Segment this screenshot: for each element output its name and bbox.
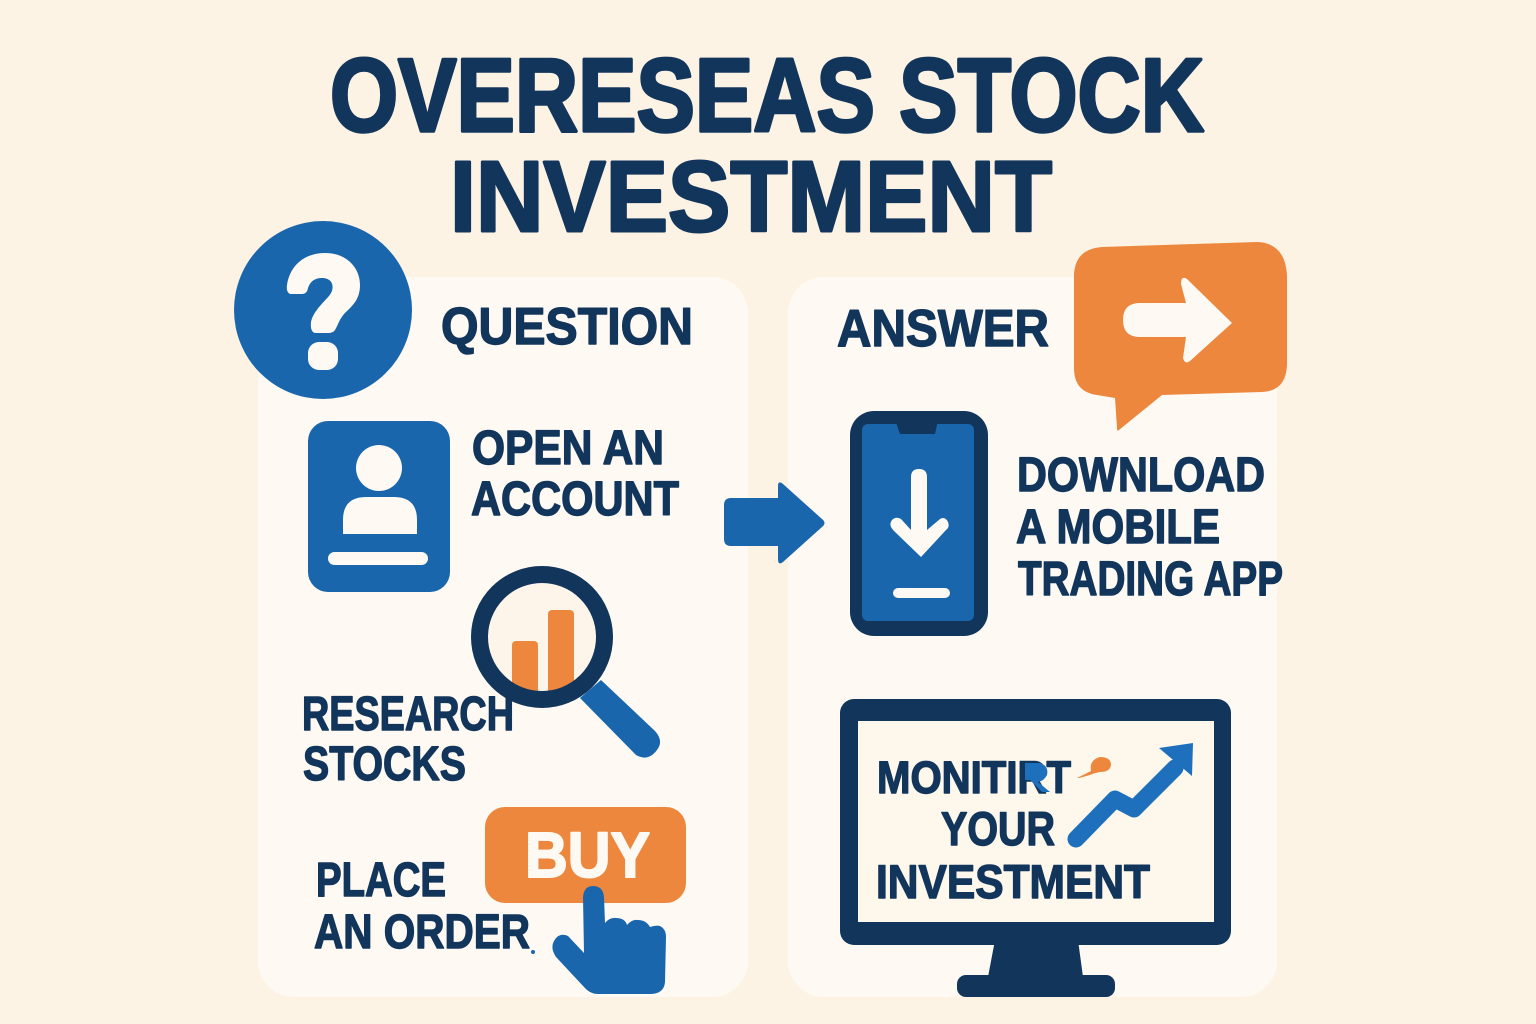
icon: question mark circle — [234, 221, 412, 399]
text: open an account: ACCOUNT — [471, 473, 679, 526]
text: open an account: OPEN AN — [472, 422, 664, 475]
title: OVERESEAS STOCK — [330, 38, 1204, 154]
text: download a mobile trading app: A MOBILE — [1016, 501, 1220, 554]
icon: magnifying glass with bars — [480, 574, 660, 758]
text: download a mobile trading app: DOWNLOAD — [1017, 449, 1265, 502]
icon: account card — [308, 421, 450, 592]
panel: question — [258, 277, 748, 997]
arrow: question to answer — [724, 482, 824, 563]
text: download a mobile trading app — [1016, 449, 1283, 606]
icon: rising chart arrow — [1076, 743, 1193, 839]
text: research stocks: STOCKS — [303, 738, 466, 791]
heading: answer: ANSWER — [837, 300, 1049, 358]
icon: pointing hand — [552, 886, 666, 994]
text: place an order: AN ORDER — [314, 906, 530, 959]
text: place an order — [314, 854, 535, 959]
text: research stocks — [302, 688, 514, 791]
text: monitor your investment: YOUR — [941, 802, 1055, 855]
button: buy: BUY — [525, 819, 650, 891]
text: monitor your investment — [876, 752, 1150, 908]
text: research stocks: RESEARCH — [302, 688, 514, 741]
infographic canvas — [234, 56, 1287, 997]
panel: answer — [788, 277, 1277, 997]
button: buy — [485, 807, 686, 903]
text: monitor your investment: MONITIRT — [877, 752, 1071, 803]
text: download a mobile trading app: TRADING APP — [1018, 553, 1283, 606]
text: monitor your investment: INVESTMENT — [876, 855, 1150, 908]
icon: mobile phone download — [850, 411, 988, 636]
heading: question: QUESTION — [441, 298, 693, 356]
icon: orange blob — [1077, 757, 1111, 778]
icon: desktop monitor — [840, 699, 1231, 997]
text: place an order: PLACE — [316, 854, 446, 907]
text: open an account — [471, 422, 679, 526]
title — [330, 38, 1204, 253]
title: INVESTMENT — [450, 141, 1052, 253]
icon: orange speech bubble with arrow — [1074, 242, 1287, 431]
